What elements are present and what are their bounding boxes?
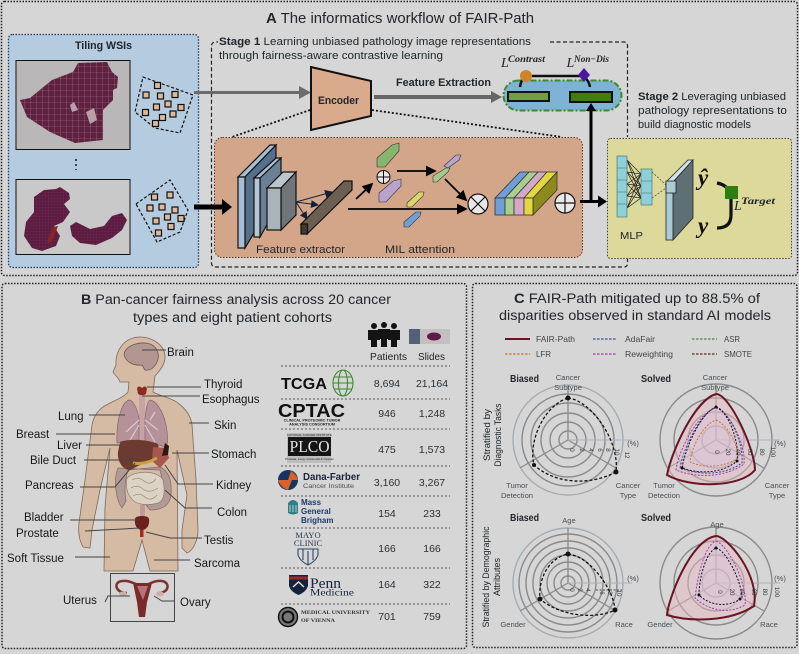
text: Stage 1 description: Stage 1 Learning unbiased pathology image representations: [219, 36, 532, 48]
label: MLP: MLP: [620, 230, 643, 242]
legend: FAIR-Path: [536, 334, 575, 344]
row: TCGA: 8,694: [374, 378, 400, 390]
colon: [115, 467, 171, 510]
row: Mayo Clinic: 166: [423, 543, 441, 555]
legend: SMOTE: [724, 349, 752, 359]
organ labels: Colon: [217, 507, 247, 519]
liver: [118, 440, 159, 470]
row: PLCO: 1,573: [419, 444, 445, 456]
encoder: Encoder: [318, 95, 360, 107]
panel: Stage 2 MLP: [608, 138, 792, 258]
label: L contrast: [500, 55, 545, 71]
row: CPTAC: CPTAC: [278, 401, 345, 421]
row: Mayo Clinic: [294, 530, 441, 565]
radar: solved demographic: 100: [773, 587, 780, 598]
radar: solved diagnostic: Type: [769, 491, 785, 500]
row label: Stratified by Diagnostic Tasks: Stratified by: [482, 408, 492, 461]
radar: biased demographic: Race: [615, 620, 633, 629]
row: CPTAC: 1,248: [419, 408, 445, 420]
feature extractor layers: [238, 145, 352, 248]
arrow: to MLP: [580, 196, 607, 208]
row: Penn Medicine: 164: [378, 579, 396, 591]
header: Patients: Patients: [370, 351, 407, 363]
radar: biased demographic: 4: [584, 588, 591, 592]
header: Slides: Slides: [418, 351, 445, 363]
row label: Stratified by Demographic Attributes: Attributes: [492, 557, 502, 596]
row: PLCO: [285, 433, 445, 463]
row: PLCO: PLCO: [290, 437, 330, 456]
dotted zoom lines: [232, 110, 562, 137]
panel: A informatics workflow: [2, 2, 798, 276]
lungs: [117, 400, 168, 447]
label: L target: [733, 197, 775, 214]
title: panel C: C FAIR-Path mitigated up to 88.5% of: [514, 291, 760, 306]
label: L target: Target: [741, 197, 775, 207]
row: Dana-Farber: 3,267: [419, 477, 445, 489]
radar: biased diagnostic: Cancer: [556, 373, 581, 382]
ellipsis: [75, 159, 77, 170]
radar: solved diagnostic: 80: [758, 449, 765, 456]
legend: [505, 334, 752, 359]
legend: LFR: [536, 349, 551, 359]
row: CPTAC: CLINICAL PROTEOMIC TUMOR: [284, 418, 341, 422]
organ labels: Esophagus: [202, 394, 260, 406]
label: L contrast: L: [500, 56, 509, 71]
label: L contrast: Contrast: [508, 55, 545, 65]
row: Dana-Farber: Cancer Institute: [303, 483, 354, 490]
slide image 1: [16, 60, 130, 150]
row: PLCO: Prostate, Lung, Colorectal & Ovarian: [285, 457, 334, 461]
radar: solved demographic: (%): [774, 574, 786, 583]
radar: biased demographic: Gender: [500, 620, 526, 629]
row: Medical University of Vienna: OF VIENNA: [301, 618, 335, 624]
row: Medical University of Vienna: MEDICAL UNIVERSITY: [301, 610, 370, 616]
title: panel A: A The informatics workflow of FAIR-Path: [266, 11, 534, 27]
row: TCGA: 21,164: [416, 378, 448, 390]
purple loss diamond: [578, 68, 590, 82]
row: Penn Medicine: Penn: [310, 576, 342, 592]
radar: biased demographic: 8: [606, 591, 613, 595]
radar: solved diagnostic: Cancer: [765, 481, 790, 490]
title: panel C: disparities observed in standard AI models: [499, 308, 771, 323]
bladder: [135, 516, 149, 530]
row label: Stratified by Diagnostic Tasks: [482, 403, 503, 466]
label: L non-dis: Non−Dis: [573, 55, 609, 65]
panel: contrastive losses: [500, 55, 622, 110]
row label: Stratified by Demographic Attributes: [481, 526, 502, 628]
row: CPTAC: ANALYSIS CONSORTIUM: [289, 422, 335, 426]
row: PLCO: NATIONAL CANCER INSTITUTE: [287, 433, 332, 437]
organ labels: Bladder: [24, 512, 64, 524]
radar: biased diagnostic: Subtype: [554, 383, 582, 392]
radar: solved demographic: 40: [738, 589, 745, 596]
organ labels: Kidney: [216, 480, 251, 492]
row: PLCO: 475: [378, 444, 396, 456]
esophagus: [139, 395, 145, 443]
radar: solved diagnostic: 0: [713, 450, 720, 454]
radar: solved demographic: Age: [710, 520, 724, 529]
title: panel C: [499, 291, 771, 323]
row label: Stratified by Diagnostic Tasks: Diagnostic Tasks: [493, 403, 503, 466]
organ labels: Prostate: [16, 528, 59, 540]
organ labels: Liver: [57, 440, 82, 452]
radar: solved demographic: 0: [716, 590, 723, 594]
radar: biased diagnostic: 6: [596, 448, 603, 452]
tile set 2: [136, 180, 188, 242]
label: Biased top: Biased: [510, 374, 539, 385]
human body diagram: [7, 337, 260, 571]
text: Stage 2 description: [638, 91, 787, 131]
label: Uterus: Uterus: [63, 595, 97, 607]
radar: biased diagnostic: Tumor: [506, 481, 528, 490]
icon: patients: [368, 322, 400, 347]
leader lines: [56, 350, 213, 560]
attention feature stack: [495, 172, 557, 215]
row label: Stratified by Demographic Attributes: Stratified by Demographic: [481, 526, 491, 628]
row: Dana-Farber: Dana-Farber: [303, 471, 360, 483]
label: L non-dis: [566, 55, 609, 71]
inset: female reproductive organs: [63, 574, 211, 622]
organ labels: Lung: [58, 411, 84, 423]
multiply node: [468, 194, 488, 214]
organ labels: Skin: [214, 420, 236, 432]
organ labels: Pancreas: [25, 480, 74, 492]
heading: Tiling WSIs: Tiling WSIs: [75, 40, 132, 52]
label: MIL attention: MIL attention: [385, 244, 455, 256]
label: Solved bottom: Solved: [641, 513, 671, 524]
radar: biased diagnostic: 4: [587, 448, 594, 452]
label: Ovary: Ovary: [180, 597, 211, 609]
y hat: ŷ: [695, 165, 709, 190]
ureter tube: [140, 505, 145, 518]
tile set 1: [135, 77, 193, 133]
organ labels: Sarcoma: [194, 558, 241, 570]
radar: solved demographic: [647, 520, 786, 639]
row: Penn Medicine: [289, 575, 441, 598]
title: panel B: [81, 292, 392, 325]
extractor arrows: [296, 192, 332, 219]
loss connector: [520, 76, 590, 87]
spleen: [162, 443, 169, 456]
row: Mayo Clinic: MAYO: [295, 530, 321, 540]
radar: biased diagnostic: 2: [578, 448, 585, 452]
attention arrows: [348, 171, 466, 209]
label: L target: L: [733, 199, 742, 214]
panel: Stage 1 dashed frame: [212, 42, 628, 267]
arrow: to non-discrimination loss: [586, 103, 596, 201]
legend: AdaFair: [625, 334, 655, 344]
text: Stage 1 description: [219, 36, 532, 62]
radar: solved diagnostic: Tumor: [653, 481, 675, 490]
slide image 2: [16, 180, 130, 254]
row: Medical University of Vienna: 701: [378, 611, 396, 623]
text: Stage 2 description: build diagnostic models: [638, 119, 751, 131]
organ labels: Testis: [204, 535, 234, 547]
organ labels: Breast: [16, 429, 50, 441]
row: Mass General Brigham: Brigham: [301, 516, 333, 525]
row: Medical University of Vienna: [278, 608, 441, 626]
radar: biased diagnostic: 0: [568, 448, 575, 452]
radar: solved diagnostic: Cancer: [703, 373, 728, 382]
arrow: tiles to encoder: [194, 86, 311, 99]
radar: solved diagnostic: 20: [724, 449, 731, 456]
target loss connector: [717, 183, 731, 228]
thyroid: [137, 386, 147, 396]
row: Penn Medicine: 322: [423, 579, 441, 591]
arrow: feature extraction: [374, 91, 502, 103]
organ labels: Brain: [167, 347, 194, 359]
orange loss dot: [520, 70, 532, 82]
row: Dana-Farber: 3,160: [374, 477, 400, 489]
output tensor: [666, 160, 693, 240]
brain: [124, 343, 158, 370]
MLP network: [617, 156, 666, 217]
row: TCGA: [281, 370, 448, 396]
body silhouette: [79, 337, 198, 571]
row: Penn Medicine: Medicine: [310, 588, 354, 598]
plus node: [377, 170, 390, 184]
radar: solved demographic: Gender: [647, 620, 673, 629]
label: L non-dis: L: [566, 56, 574, 71]
text: Stage 1 description: through fairness-aware contrastive learning: [219, 50, 443, 62]
radar: biased diagnostic: Cancer: [616, 481, 641, 490]
feature cuboids: [377, 143, 461, 227]
bile duct: [133, 458, 157, 463]
intestine folds: [131, 478, 158, 499]
radar: biased diagnostic: 12: [623, 452, 630, 459]
panel: Tiling WSIs: [8, 34, 198, 268]
text: Stage 2 description: pathology representations to: [638, 105, 787, 117]
organ labels: Stomach: [211, 449, 256, 461]
radar: solved diagnostic: Detection: [648, 491, 680, 500]
text: Stage 2 description: Stage 2 Leveraging unbiased: [638, 91, 786, 103]
arrow: tiles to feature extractor: [194, 199, 232, 215]
radar: solved diagnostic: 40: [734, 449, 741, 456]
row: CPTAC: [278, 401, 445, 426]
radar: biased diagnostic: Detection: [501, 491, 533, 500]
radar: solved demographic: Race: [760, 620, 778, 629]
radar: biased demographic: 0: [568, 588, 575, 592]
label: Feature Extraction: Feature Extraction: [396, 77, 491, 89]
small intestine: [126, 472, 164, 505]
panel: MIL module: [214, 138, 582, 258]
y true: y: [695, 213, 709, 238]
radar: solved diagnostic: [648, 373, 790, 500]
encoder: [311, 67, 371, 130]
radar: biased demographic: [500, 516, 639, 638]
prostate: [140, 530, 144, 537]
plus node: [555, 193, 575, 213]
organ labels: Bile Duct: [30, 455, 77, 467]
row: Mayo Clinic: 166: [378, 543, 396, 555]
row: Dana-Farber: [278, 470, 445, 490]
stomach: [152, 447, 169, 468]
legend: ASR: [724, 334, 740, 344]
radar: biased diagnostic: 8: [604, 448, 611, 452]
radar: biased demographic: (%): [627, 574, 639, 583]
radar: solved diagnostic: (%): [774, 439, 786, 448]
title: panel B: types and eight patient cohorts: [133, 310, 332, 325]
radar: biased diagnostic: 10: [613, 449, 620, 456]
row: TCGA: TCGA: [281, 376, 327, 393]
row: Mass General Brigham: 154: [378, 508, 396, 520]
panel: B pan-cancer analysis: [2, 284, 466, 648]
radar: biased demographic: 6: [598, 591, 605, 595]
radar: biased demographic: 2: [576, 588, 583, 592]
panel: C fairness results: [472, 284, 797, 648]
lung veins: [126, 412, 158, 442]
legend: Reweighting: [625, 349, 673, 359]
label: Biased bottom: Biased: [510, 513, 539, 524]
row: Mass General Brigham: 233: [423, 508, 441, 520]
radar: solved demographic: 20: [728, 589, 735, 596]
organ labels: [7, 347, 260, 570]
radar: biased diagnostic: Type: [620, 491, 636, 500]
radar: solved demographic: 60: [750, 589, 757, 596]
radar: solved diagnostic: Subtype: [701, 383, 729, 392]
row: Mass General Brigham: General: [301, 507, 331, 516]
radar: solved demographic: 80: [761, 589, 768, 596]
cohort table: [278, 322, 450, 626]
label: Solved top: Solved: [641, 374, 671, 385]
title: panel B: B Pan-cancer fairness analysis across 20 cancer: [81, 292, 392, 307]
organ labels: Soft Tissue: [7, 553, 64, 565]
radar: biased diagnostic: (%): [627, 439, 639, 448]
radar: biased demographic: 10: [615, 590, 622, 597]
icon: slide: [409, 329, 450, 344]
organ labels: Thyroid: [204, 379, 242, 391]
row: CPTAC: 946: [378, 408, 396, 420]
radar: solved diagnostic: 60: [746, 449, 753, 456]
row: Mass General Brigham: [288, 498, 441, 525]
target loss square: [725, 186, 738, 199]
radar: biased diagnostic: [501, 373, 641, 500]
radar: biased demographic: Age: [562, 516, 576, 525]
row: Mayo Clinic: CLINIC: [294, 538, 322, 548]
label: Feature extractor: Feature extractor: [256, 244, 345, 256]
row: Medical University of Vienna: 759: [423, 611, 441, 623]
row: Mass General Brigham: Mass: [301, 498, 322, 507]
radar: solved diagnostic: 100: [769, 447, 776, 458]
